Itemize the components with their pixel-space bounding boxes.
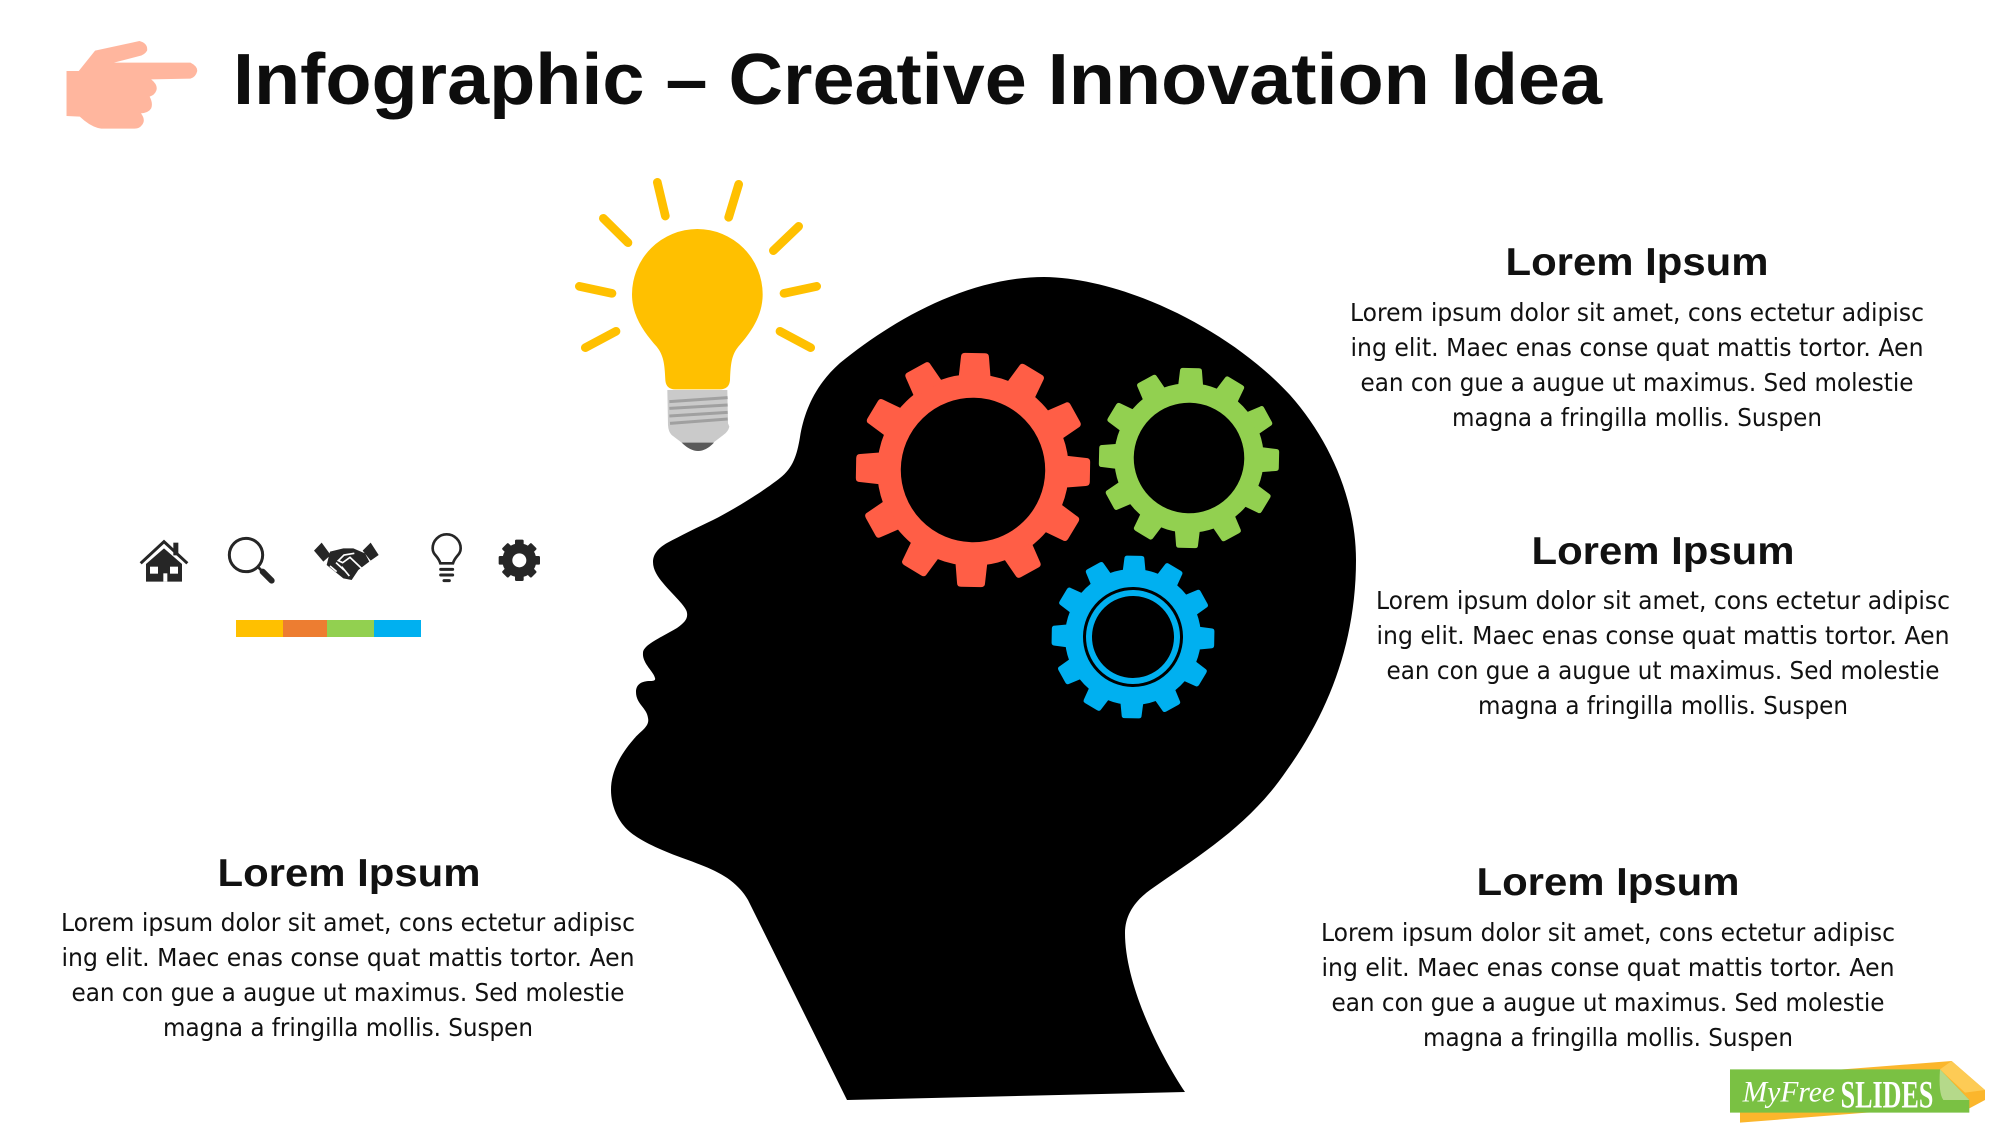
body text: Lorem ipsum dolor sit amet, cons ectetur adipisc xyxy=(1321,918,1895,947)
body text: ing elit. Maec enas conse quat mattis tortor. Aen xyxy=(1322,953,1894,982)
icon: handshake xyxy=(314,543,379,580)
heading: Lorem Ipsum xyxy=(1532,530,1794,573)
body text xyxy=(61,908,635,1042)
body text: ean con gue a augue ut maximus. Sed molestie xyxy=(1332,988,1884,1017)
gear: green xyxy=(1097,366,1281,550)
body text: Lorem ipsum dolor sit amet, cons ectetur adipisc xyxy=(61,908,635,937)
body text: ing elit. Maec enas conse quat mattis tortor. Aen xyxy=(1376,621,1950,650)
icon: pointing hand xyxy=(67,41,197,129)
title: Infographic – Creative Innovation Idea xyxy=(233,40,1603,120)
text block: top right xyxy=(1350,241,1924,432)
icon row xyxy=(141,534,540,582)
body text xyxy=(1321,918,1895,1052)
body text: magna a fringilla mollis. Suspen xyxy=(1478,691,1848,720)
body text xyxy=(1376,586,1950,720)
head silhouette xyxy=(611,277,1356,1100)
heading: Lorem Ipsum xyxy=(218,852,480,895)
body text: ean con gue a augue ut maximus. Sed molestie xyxy=(72,978,624,1007)
text block: bottom right xyxy=(1321,861,1895,1052)
logo: MyFree Slides: SLIDES xyxy=(1841,1072,1933,1116)
text block: middle right xyxy=(1376,530,1950,720)
icon: light bulb xyxy=(579,182,817,451)
icon: house xyxy=(141,542,187,582)
body text: ing elit. Maec enas conse quat mattis tortor. Aen xyxy=(1350,333,1924,362)
colour bar xyxy=(236,620,421,637)
icon: gear xyxy=(499,540,540,581)
body text: magna a fringilla mollis. Suspen xyxy=(1423,1023,1793,1052)
body text: Lorem ipsum dolor sit amet, cons ectetur adipisc xyxy=(1376,586,1950,615)
icon: magnifier xyxy=(229,538,272,581)
body text: ean con gue a augue ut maximus. Sed molestie xyxy=(1386,656,1940,685)
body text: Lorem ipsum dolor sit amet, cons ectetur adipisc xyxy=(1350,298,1924,327)
body text: magna a fringilla mollis. Suspen xyxy=(1452,403,1822,432)
heading: Lorem Ipsum xyxy=(1506,241,1768,284)
gear: blue xyxy=(1050,554,1216,720)
body text: ing elit. Maec enas conse quat mattis tortor. Aen xyxy=(62,943,634,972)
icon: outline bulb xyxy=(433,534,461,581)
body text: ean con gue a augue ut maximus. Sed molestie xyxy=(1360,368,1914,397)
text block: bottom left xyxy=(61,852,635,1042)
logo: MyFree Slides: MyFree xyxy=(1742,1077,1835,1109)
logo: MyFree Slides xyxy=(1730,1061,1985,1123)
body text: magna a fringilla mollis. Suspen xyxy=(163,1013,533,1042)
body text xyxy=(1350,298,1924,432)
gear: red xyxy=(854,351,1092,589)
heading: Lorem Ipsum xyxy=(1476,861,1740,904)
